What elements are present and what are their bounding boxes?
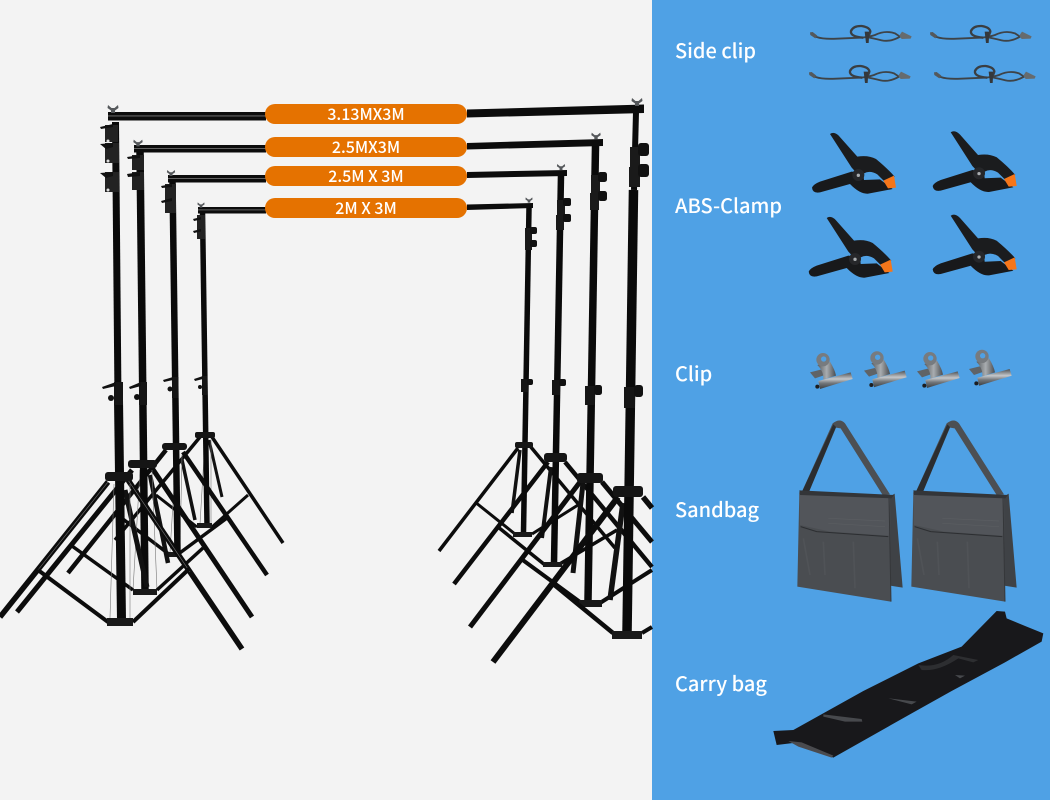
- left stand: 2.5M small: [68, 170, 267, 575]
- size label: 2.5M X 3M: 2.5M X 3M: [328, 163, 404, 187]
- left stand: 3.13M: [0, 105, 266, 649]
- panel: accessories: [652, 0, 1050, 800]
- left stand: 2.5M large: [17, 140, 266, 617]
- icon: carry bag: [773, 611, 1043, 758]
- heading: Carry bag: Carry bag: [675, 668, 767, 697]
- icons: sandbags: [797, 420, 1017, 602]
- size label: 3.13MX3M: 3.13MX3M: [327, 101, 405, 125]
- size label: 2.5MX3M: 2.5MX3M: [332, 134, 400, 158]
- heading: Clip: Clip: [675, 358, 712, 387]
- heading: Side clip: Side clip: [675, 35, 756, 64]
- icons: ABS clamps: [809, 131, 1017, 278]
- heading: ABS-Clamp: ABS-Clamp: [675, 190, 782, 219]
- size label: 2M X 3M: 2M X 3M: [335, 195, 397, 219]
- background panel: stands: [0, 0, 652, 800]
- size label: 2M X 3M: [265, 195, 467, 219]
- icons: side clips: [809, 26, 1036, 83]
- heading: Sandbag: Sandbag: [675, 494, 760, 523]
- right stand: 2.5M large: [467, 133, 652, 627]
- size label: 2.5MX3M: [265, 134, 467, 158]
- right stand: 2M: [439, 197, 615, 551]
- right stand: 3.13M: [467, 98, 652, 662]
- right stand: 2.5M small: [454, 164, 652, 584]
- size label: 3.13MX3M: [265, 101, 467, 125]
- size label: 2.5M X 3M: [265, 163, 467, 187]
- left stand: 2M: [115, 202, 283, 543]
- backdrop stands illustration: [0, 98, 652, 662]
- icons: metal clips: [810, 350, 1012, 389]
